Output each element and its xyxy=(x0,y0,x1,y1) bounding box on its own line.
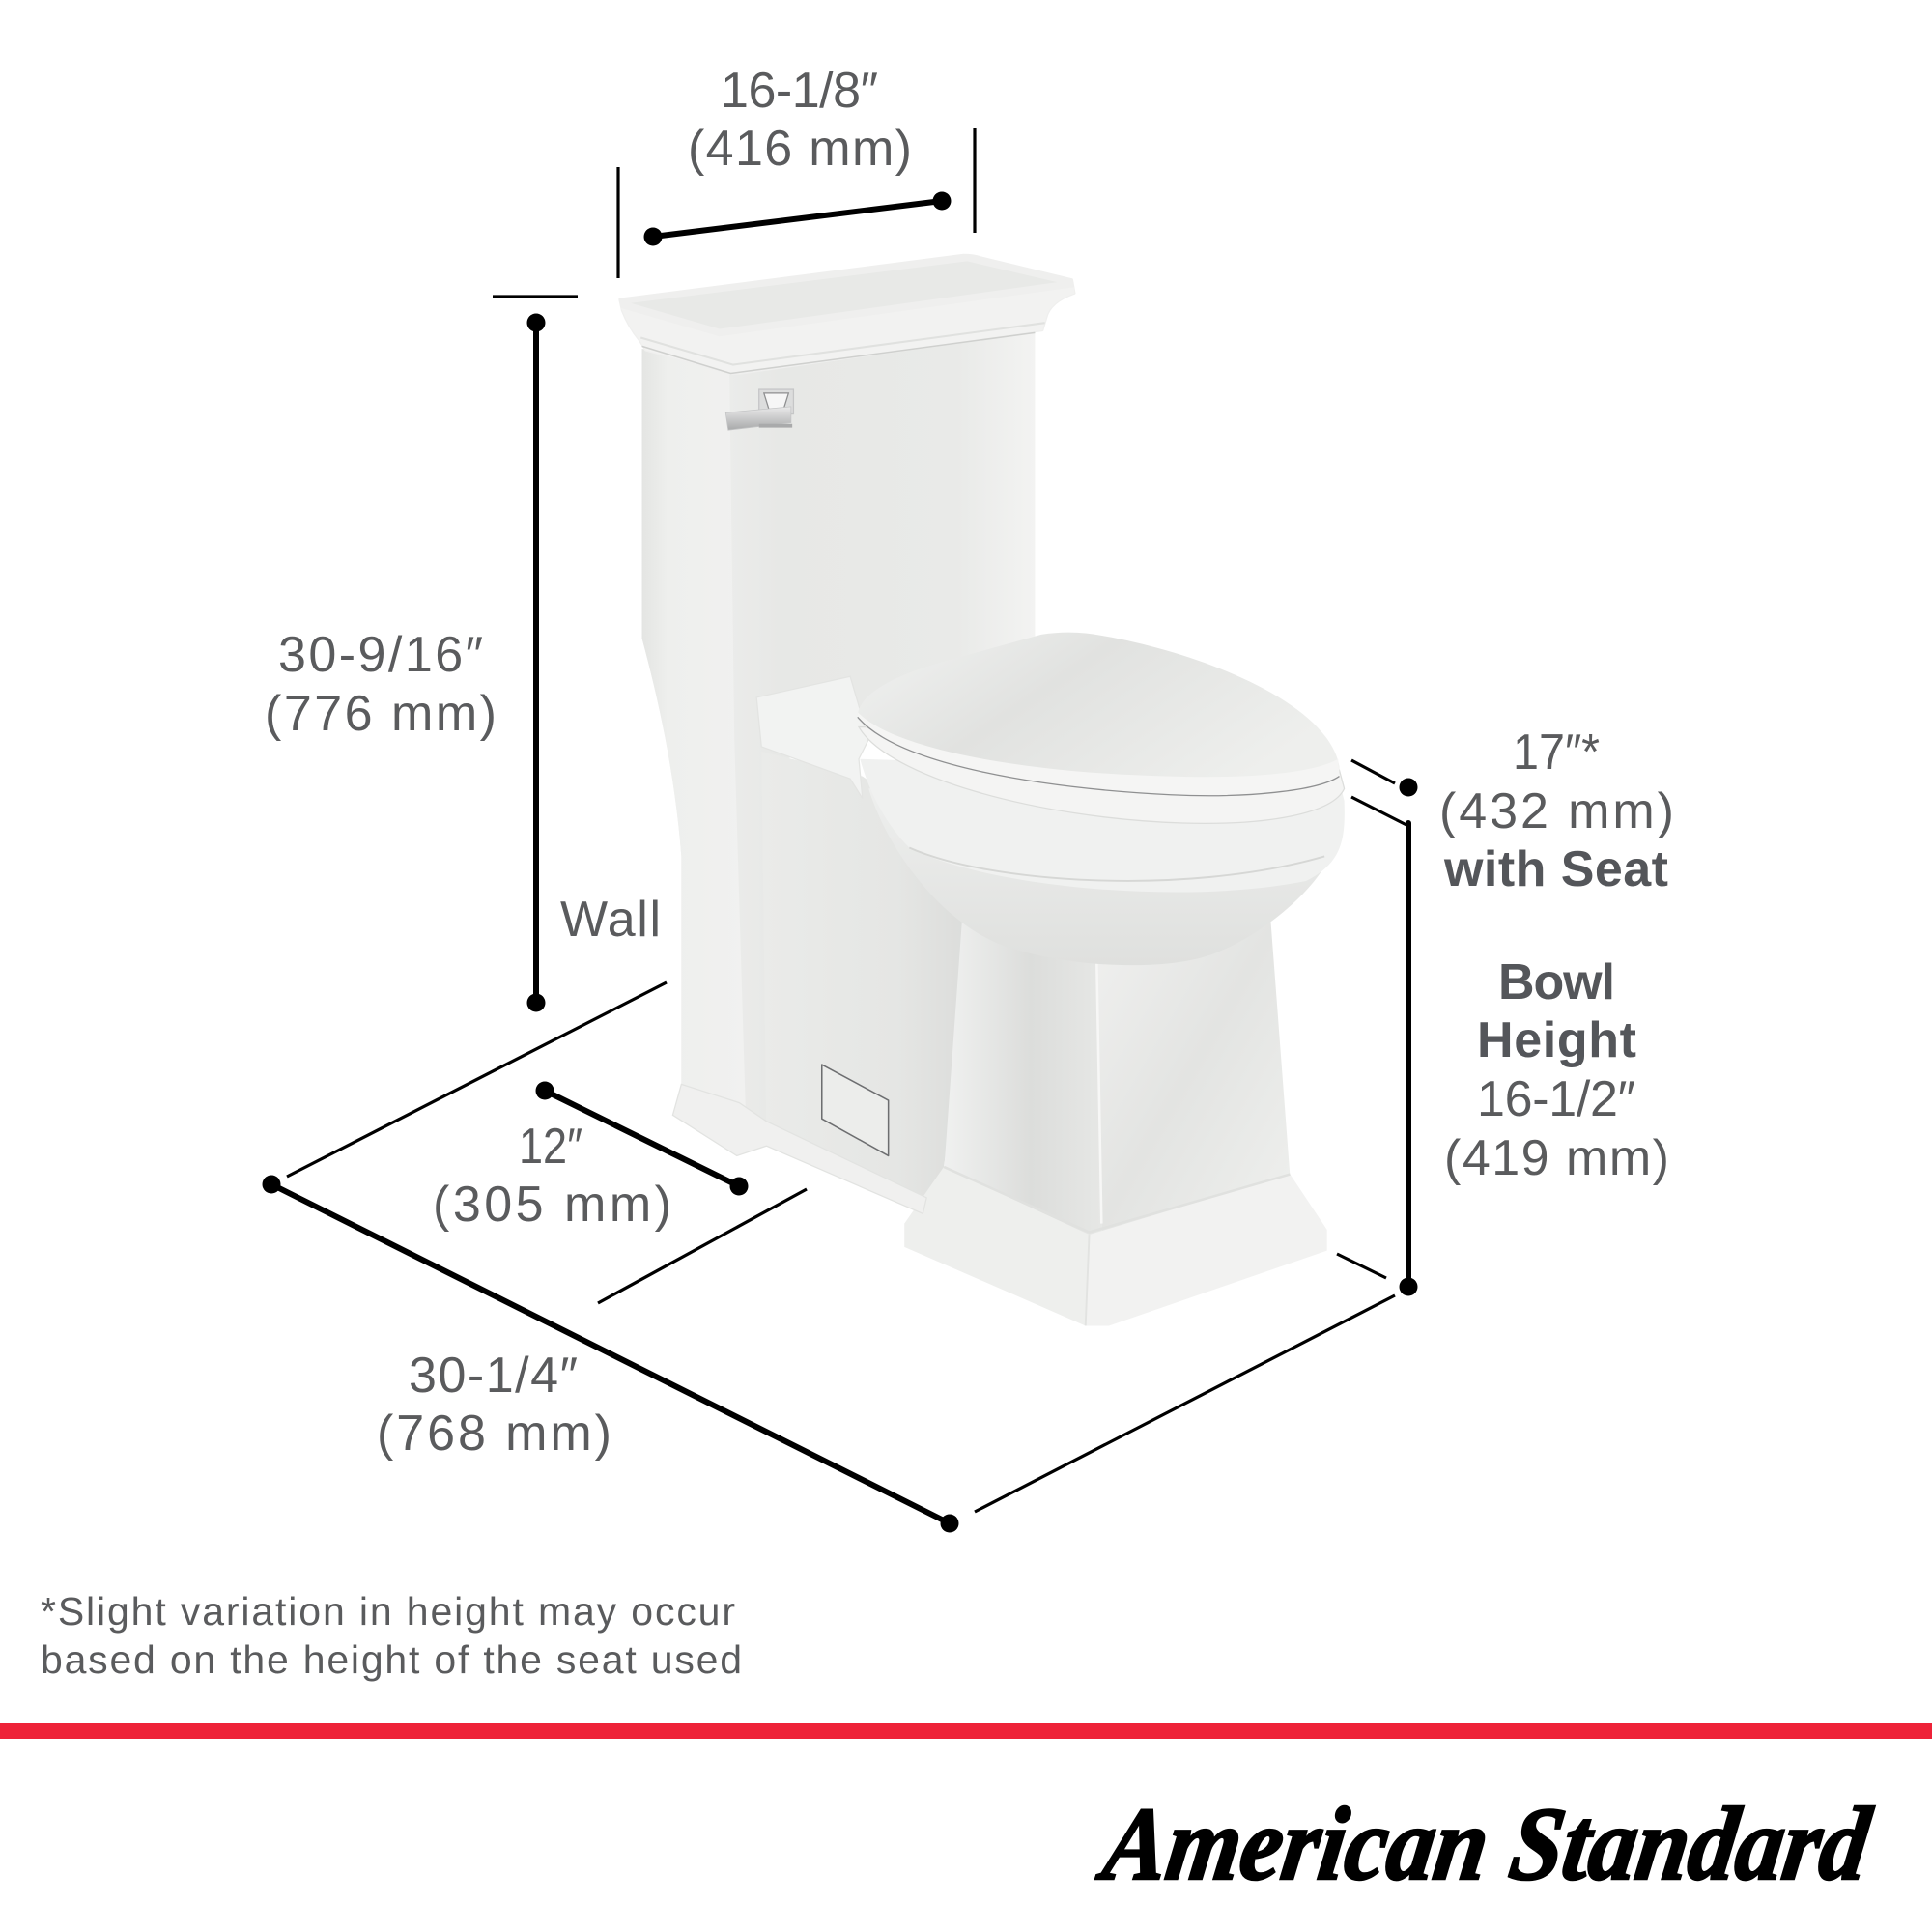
dimension: overall height xyxy=(265,297,578,1012)
toilet illustration xyxy=(620,255,1345,1325)
dimension: bowl height: Height xyxy=(1477,1012,1636,1068)
pedestal xyxy=(944,899,1290,1237)
red divider bar xyxy=(0,1723,1932,1739)
footnote: based on the height of the seat used xyxy=(41,1637,742,1682)
dimension: bowl height: (432 mm) xyxy=(1439,783,1674,839)
dimension: rough-in xyxy=(433,1082,807,1303)
dimension: bowl height: 16-1/2″ xyxy=(1477,1071,1635,1127)
bowl xyxy=(860,759,1345,965)
rear deck shelf xyxy=(756,676,868,799)
flush lever xyxy=(725,389,793,430)
access panel xyxy=(822,1065,889,1155)
dimension: bowl height: 17″* xyxy=(1513,724,1600,781)
dimension: bowl height xyxy=(1337,724,1674,1296)
base plinth xyxy=(904,1167,1327,1325)
dimension: overall height: (776 mm) xyxy=(265,686,497,742)
tank body xyxy=(642,330,1035,1155)
wall label: Wall xyxy=(560,892,661,948)
toilet seat ring xyxy=(859,727,1345,823)
dimension: bowl height: (419 mm) xyxy=(1444,1130,1669,1186)
toilet seat lid xyxy=(858,633,1339,796)
trapway side wall xyxy=(761,752,985,1213)
dimension: overall depth: (768 mm) xyxy=(377,1406,611,1462)
footnote xyxy=(41,1589,742,1682)
dimension: bowl height: with Seat xyxy=(1443,841,1668,897)
brand logo: American Standard xyxy=(1092,1786,1878,1902)
wall label xyxy=(287,892,667,1177)
tank lid xyxy=(620,255,1074,373)
dimension: overall depth xyxy=(263,1175,1395,1532)
dimension: tank width: (416 mm) xyxy=(688,121,912,177)
dimension: overall height: 30-9/16″ xyxy=(278,627,483,683)
dimension: tank width xyxy=(618,63,975,278)
tank skirting xyxy=(672,1084,926,1213)
dimension: bowl height: Bowl xyxy=(1498,954,1615,1010)
dimension: rough-in: 12″ xyxy=(519,1119,582,1175)
dimension: rough-in: (305 mm) xyxy=(433,1177,671,1233)
dimension: tank width: 16-1/8″ xyxy=(721,63,878,119)
dimension: overall depth: 30-1/4″ xyxy=(409,1348,578,1404)
footnote: *Slight variation in height may occur xyxy=(41,1589,735,1634)
